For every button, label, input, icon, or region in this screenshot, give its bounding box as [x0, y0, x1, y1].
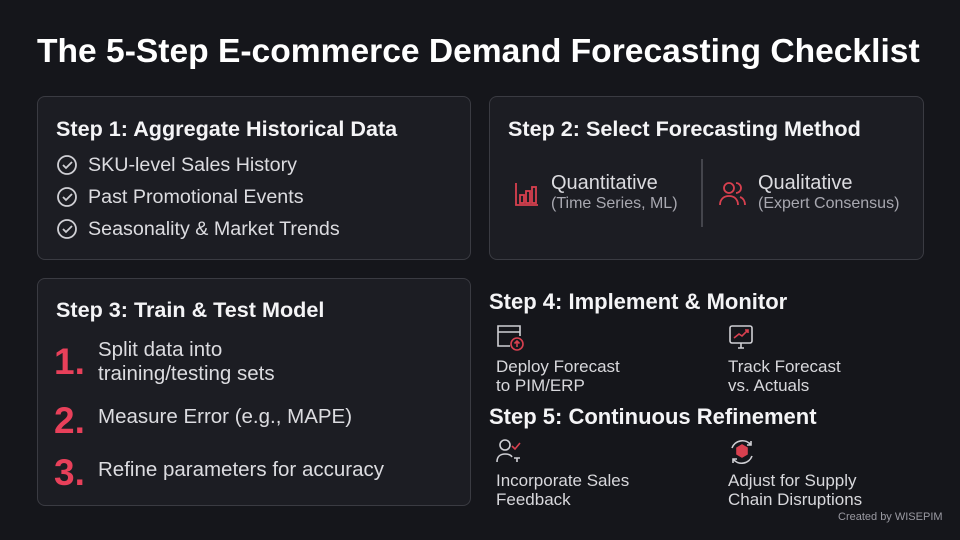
- panel: step 3: [37, 278, 471, 506]
- qualitative text: (Expert Consensus): [758, 195, 899, 212]
- qualitative text: [758, 172, 899, 212]
- icon: people: [719, 182, 746, 205]
- heading step 5: Step 5: Continuous Refinement: [489, 404, 817, 429]
- heading step 3: Step 3: Train & Test Model: [56, 297, 324, 322]
- qualitative text: Qualitative: [758, 172, 852, 194]
- item: track: vs. Actuals: [728, 376, 809, 395]
- numbered list: Measure Error (e.g., MAPE): [98, 405, 352, 428]
- checklist: Seasonality & Market Trends: [88, 218, 340, 240]
- title: The 5-Step E-commerce Demand Forecasting Checklist: [37, 33, 920, 70]
- checklist: [57, 154, 340, 240]
- item: sales feedback: Incorporate Sales: [496, 471, 629, 490]
- heading step 1: Step 1: Aggregate Historical Data: [56, 116, 397, 141]
- quantitative text: [551, 172, 678, 212]
- numbered list: [54, 338, 384, 493]
- numbered list: 3.: [54, 452, 85, 493]
- checklist: SKU-level Sales History: [88, 154, 297, 176]
- icon: bar chart: [515, 183, 538, 206]
- heading step 2: Step 2: Select Forecasting Method: [508, 116, 861, 141]
- item: deploy: [496, 325, 620, 395]
- panel: step 2: [489, 96, 924, 260]
- item: track: Track Forecast: [728, 357, 841, 376]
- numbered list: Split data into: [98, 338, 222, 361]
- quantitative text: (Time Series, ML): [551, 195, 678, 212]
- item: supply chain: Adjust for Supply: [728, 471, 857, 490]
- credit: Created by WISEPIM: [838, 511, 943, 523]
- item: supply chain: [728, 440, 862, 509]
- panel: step 1: [37, 96, 471, 260]
- item: sales feedback: Feedback: [496, 490, 571, 509]
- heading step 4: Step 4: Implement & Monitor: [489, 289, 787, 314]
- numbered list: Refine parameters for accuracy: [98, 458, 384, 481]
- item: sales feedback: [496, 439, 629, 509]
- quantitative text: Quantitative: [551, 172, 658, 194]
- numbered list: 1.: [54, 341, 85, 382]
- checklist: Past Promotional Events: [88, 186, 304, 208]
- numbered list: 2.: [54, 400, 85, 441]
- item: supply chain: Chain Disruptions: [728, 490, 862, 509]
- numbered list: training/testing sets: [98, 362, 275, 385]
- item: track: [728, 325, 841, 395]
- item: deploy: to PIM/ERP: [496, 376, 585, 395]
- item: deploy: Deploy Forecast: [496, 357, 620, 376]
